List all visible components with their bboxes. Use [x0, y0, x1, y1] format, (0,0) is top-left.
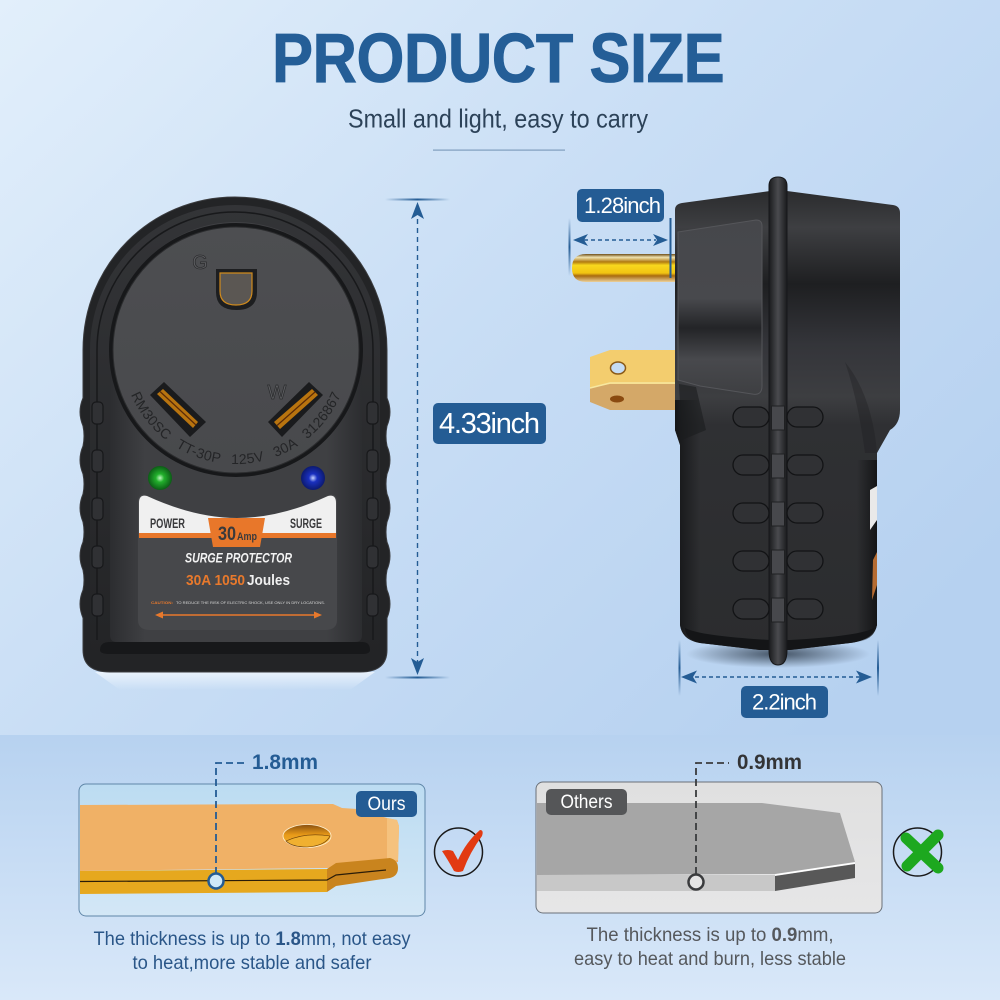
blade front edge shine	[387, 818, 399, 861]
label text: 2.2inch	[752, 690, 817, 714]
housing	[675, 191, 900, 650]
product label: 30A 1050	[186, 573, 245, 589]
blade dark tab	[775, 864, 855, 891]
right extension line	[670, 218, 672, 278]
flat blade upper	[590, 350, 680, 390]
product label: SURGE	[290, 516, 322, 531]
label badge	[577, 189, 664, 222]
moulded arc text	[130, 392, 342, 464]
product label: Amp	[237, 531, 257, 543]
floor shadow	[686, 640, 870, 668]
blade top face	[80, 804, 399, 871]
caption: ours: The thickness is up to 1.8mm, not easy	[94, 928, 411, 950]
left extension line	[568, 218, 570, 276]
lower band background	[0, 735, 1000, 1000]
blade side edge	[80, 869, 327, 894]
right arrowhead	[653, 234, 668, 246]
right housing edge shade	[857, 460, 877, 642]
floor reflection	[95, 672, 375, 690]
surge LED	[301, 466, 325, 490]
round pin	[572, 254, 684, 282]
product label: TO REDUCE THE RISK OF ELECTRIC SHOCK, USE ONLY IN DRY LOCATIONS.	[176, 601, 325, 605]
product label: POWER	[150, 516, 185, 531]
left arrowhead	[681, 670, 697, 684]
icon: green cross mark	[894, 828, 942, 876]
power LED	[148, 466, 172, 490]
casing rim	[90, 205, 380, 660]
marker dot	[208, 874, 224, 888]
card	[536, 782, 882, 913]
measurement 1.8mm: 1.8mm	[252, 751, 318, 774]
bottom edge shade	[685, 628, 874, 650]
title: PRODUCT SIZE	[272, 18, 724, 97]
side view of surge protector	[572, 177, 900, 668]
marker dot	[688, 874, 704, 890]
blade upper hole	[610, 362, 626, 374]
bottom extension line	[385, 676, 450, 678]
outer casing with ridged sides	[80, 197, 390, 672]
product label: CAUTION:	[151, 601, 173, 605]
blade top face	[537, 803, 855, 875]
label badge	[741, 686, 828, 718]
G mark: G	[192, 252, 208, 274]
card	[79, 784, 425, 916]
panel: ours blade	[79, 751, 425, 916]
blade fold tab	[327, 858, 398, 892]
upper right curved shade	[845, 362, 877, 453]
others badge	[546, 789, 627, 815]
background	[0, 0, 1000, 735]
ground slot	[216, 269, 257, 310]
left extension line	[678, 640, 680, 696]
dashed leader	[696, 763, 729, 874]
label edge	[870, 486, 877, 600]
label text: 1.28inch	[584, 193, 661, 218]
right neutral slot	[268, 382, 323, 437]
side grip grooves	[733, 407, 823, 619]
measurement 0.9mm: 0.9mm	[737, 751, 802, 774]
arched inner line	[97, 212, 373, 640]
ours badge text: Ours	[368, 794, 406, 815]
dashed arrow	[584, 239, 656, 241]
caption: others line 2: easy to heat and burn, less stable	[574, 948, 846, 970]
width dimension 2.2inch	[678, 640, 879, 718]
side notches	[92, 402, 378, 616]
top arrowhead	[411, 202, 424, 219]
caption: others: The thickness is up to 0.9mm,	[586, 924, 834, 946]
front face panel	[110, 222, 362, 642]
dashed leader	[216, 763, 248, 874]
centre flange	[769, 177, 787, 665]
top extension line	[385, 198, 450, 200]
bottom arrowhead	[411, 658, 424, 675]
icon: red check mark	[434, 828, 483, 876]
front view of surge protector	[80, 196, 390, 686]
product label: Joules	[247, 573, 290, 589]
round socket face	[109, 223, 363, 477]
front view of surge protector: RM30SC TT-30P 125V 30A 3126867	[132, 392, 340, 464]
hole	[283, 824, 331, 848]
W mark: W	[268, 382, 287, 404]
ours badge	[356, 791, 417, 817]
right arrowhead	[856, 670, 872, 684]
product label	[138, 495, 337, 630]
white highlight	[775, 863, 855, 875]
blade side edge	[537, 875, 775, 891]
right extension line	[877, 640, 879, 696]
product label: SURGE PROTECTOR	[185, 550, 292, 566]
seam line	[80, 870, 386, 882]
height dimension 4.33inch	[385, 198, 546, 678]
left hot slot	[150, 382, 206, 437]
others badge text: Others	[560, 792, 612, 813]
vertical dashed line	[416, 210, 418, 666]
flange segments	[772, 406, 784, 622]
blade lower hole	[610, 396, 624, 402]
cap panel	[678, 220, 762, 394]
flat blade lower	[590, 384, 680, 410]
panel: others blade	[536, 751, 882, 913]
product label: 30	[218, 524, 236, 545]
blade seam	[590, 383, 680, 388]
housing shoulder	[679, 384, 706, 440]
label badge	[433, 403, 546, 444]
left arrowhead	[573, 234, 588, 246]
title divider	[433, 150, 565, 151]
left housing edge shade	[675, 400, 700, 643]
subtitle: Small and light, easy to carry	[348, 104, 648, 134]
label text: 4.33inch	[439, 408, 540, 440]
panel bottom shadow	[100, 642, 370, 654]
dashed arrow	[695, 676, 862, 678]
depth dimension 1.28inch	[568, 189, 672, 278]
caption: ours line 2: to heat,more stable and safer	[132, 952, 372, 974]
